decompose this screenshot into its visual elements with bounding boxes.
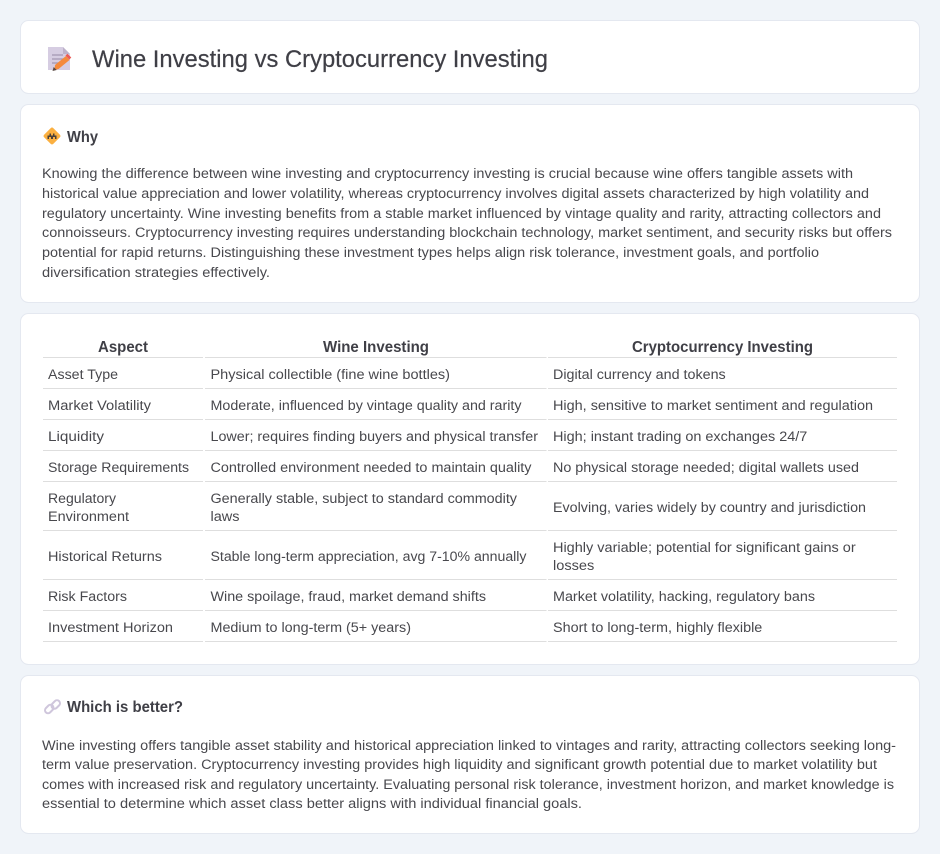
text block: which is better paragraph: essential to determine which asset class better aligns with individual financial goals.: [42, 796, 582, 812]
panel: comparison table: [20, 314, 920, 664]
heading: which is better: Which is better?: [67, 699, 183, 716]
title: Wine Investing vs Cryptocurrency Investing: [92, 46, 548, 73]
panel: why: [20, 104, 920, 302]
text block: which is better paragraph: term value preservation. Cryptocurrency investing provides high liquidity and significant growth potential due to market volatility but: [42, 757, 877, 773]
table row: market volatility: Market Volatility: [48, 398, 152, 414]
table header row: Aspect: [98, 339, 148, 356]
text block: why paragraph: Knowing the difference between wine investing and cryptocurrency investing is crucial because wine offers tangible assets with: [42, 166, 853, 182]
table header row: Cryptocurrency Investing: [632, 339, 813, 356]
table row: historical returns: Highly variable; potential for significant gains or: [553, 540, 856, 556]
table row: historical returns: losses: [553, 558, 594, 574]
text block: why paragraph: connoisseurs. Cryptocurrency investing requires understanding blockchain technology, market sentiment, and security risks but offers: [42, 225, 892, 241]
text block: which is better paragraph: Wine investing offers tangible asset stability and historical appreciation linked to vintages and rarity, attracting collectors seeking long-: [42, 738, 896, 754]
table row: asset type: Physical collectible (fine wine bottles): [210, 367, 450, 383]
table row: regulatory environment: Evolving, varies widely by country and jurisdiction: [553, 500, 866, 516]
table row: regulatory environment: Environment: [48, 509, 129, 525]
panel: header: [20, 20, 920, 94]
heading: why: Why: [67, 129, 98, 146]
table row: storage requirements: Controlled environment needed to maintain quality: [210, 460, 532, 476]
table row: liquidity: [43, 429, 897, 451]
table row: investment horizon: Investment Horizon: [48, 620, 173, 636]
table row: liquidity: High; instant trading on exchanges 24/7: [553, 429, 807, 445]
table row: storage requirements: No physical storage needed; digital wallets used: [553, 460, 859, 476]
table row: asset type: Digital currency and tokens: [553, 367, 726, 383]
panel: which is better: [20, 676, 920, 834]
table row: risk factors: Wine spoilage, fraud, market demand shifts: [210, 589, 486, 605]
icon: chain link: [44, 699, 61, 714]
text block: why paragraph: potential for rapid returns. Distinguishing these investment types helps align risk tolerance, investment goals, and portfolio: [42, 245, 819, 261]
table row: risk factors: Market volatility, hacking, regulatory bans: [553, 589, 815, 605]
table row: liquidity: Liquidity: [48, 429, 105, 445]
table row: market volatility: High, sensitive to market sentiment and regulation: [553, 398, 873, 414]
table row: storage requirements: [43, 460, 897, 482]
table row: historical returns: Stable long-term appreciation, avg 7-10% annually: [210, 549, 527, 565]
table row: historical returns: [43, 540, 897, 580]
text block: which is better paragraph: comes with increased risk and regulatory uncertainty. Evaluating personal risk tolerance, investment horizon, and market knowledge is: [42, 777, 894, 793]
table row: investment horizon: Medium to long-term (5+ years): [210, 620, 411, 636]
text block: why paragraph: regulatory uncertainty. Wine investing benefits from a stable market influenced by vintage quality and rarity, attracting collectors and: [42, 206, 881, 222]
icon: document with pencil: [48, 47, 71, 71]
table row: regulatory environment: Regulatory: [48, 491, 117, 507]
table row: risk factors: Risk Factors: [48, 589, 127, 605]
table row: historical returns: Historical Returns: [48, 549, 162, 565]
text block: which is better paragraph: [42, 738, 896, 812]
table row: regulatory environment: laws: [210, 509, 240, 525]
table row: investment horizon: [43, 620, 897, 642]
icon: warning diamond: [43, 127, 61, 145]
table row: market volatility: Moderate, influenced by vintage quality and rarity: [210, 398, 522, 414]
table row: liquidity: Lower; requires finding buyers and physical transfer: [210, 429, 538, 445]
table row: asset type: [43, 367, 897, 389]
table row: regulatory environment: [43, 491, 897, 531]
table row: asset type: Asset Type: [48, 367, 118, 383]
table row: storage requirements: Storage Requirements: [48, 460, 189, 476]
text block: why paragraph: historical value appreciation and lower volatility, whereas cryptocurrency involves digital assets characterized by high volatility and: [42, 186, 869, 202]
table row: risk factors: [43, 589, 897, 611]
table header row: [43, 339, 897, 358]
table row: investment horizon: Short to long-term, highly flexible: [553, 620, 762, 636]
table row: regulatory environment: Generally stable, subject to standard commodity: [210, 491, 518, 507]
text block: why paragraph: diversification strategies effectively.: [42, 265, 270, 281]
table header row: Wine Investing: [323, 339, 429, 356]
text block: why paragraph: [42, 166, 892, 281]
table row: market volatility: [43, 398, 897, 420]
